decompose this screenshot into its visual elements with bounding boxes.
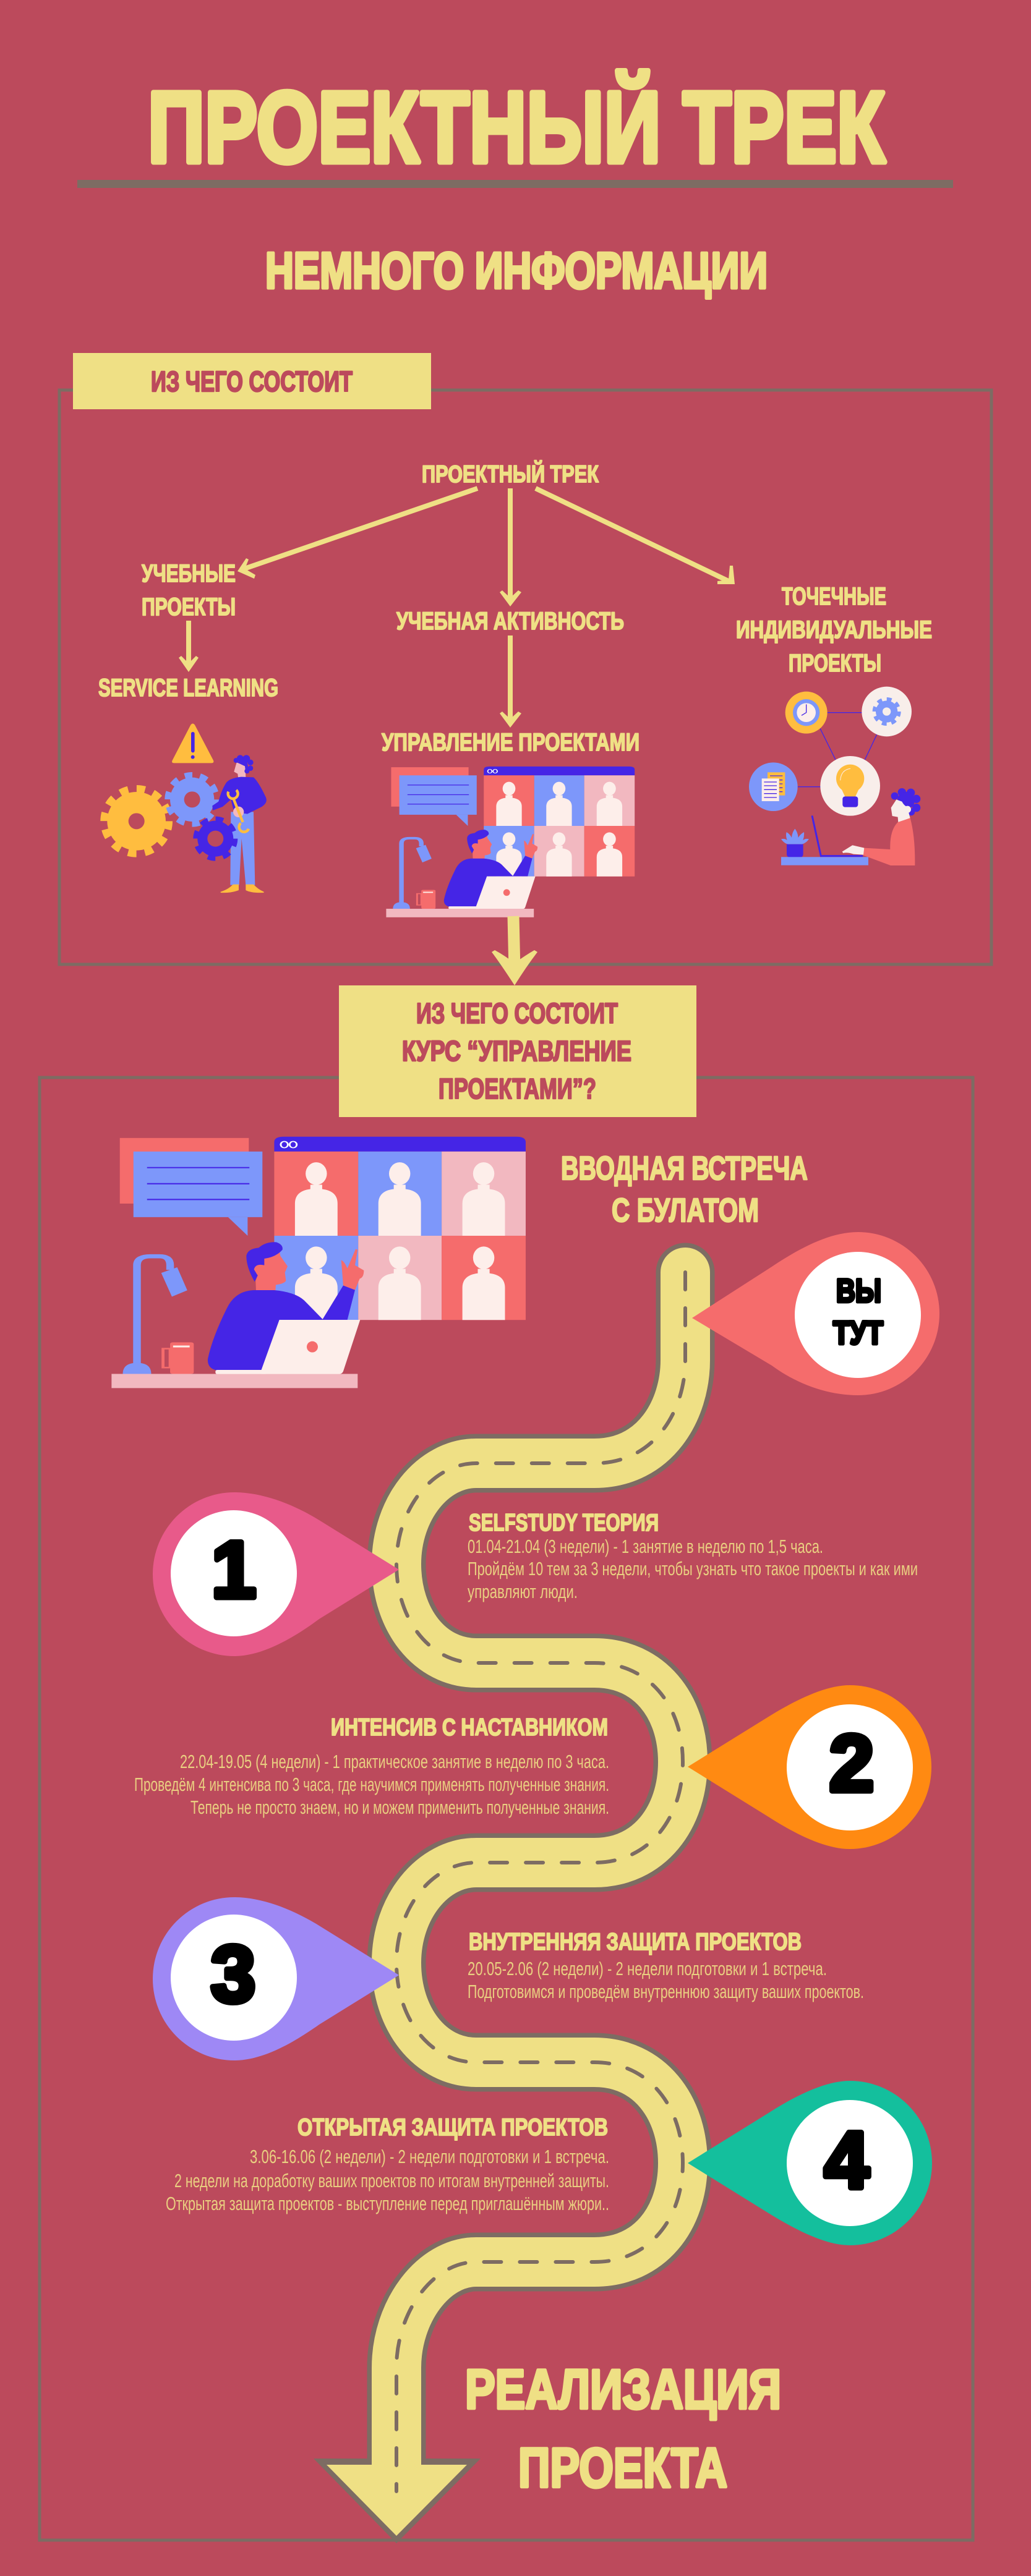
legs <box>221 812 264 893</box>
arrow: to course heading <box>492 916 537 985</box>
icon: dark gear <box>195 819 235 859</box>
text block: intensive with mentor: ИНТЕНСИВ С НАСТАВНИКОМ <box>331 1714 608 1741</box>
icon: online meeting illustration large <box>111 1137 526 1388</box>
label: project management: УПРАВЛЕНИЕ ПРОЕКТАМИ <box>382 729 640 756</box>
pin: you are here: ТУТ <box>833 1315 883 1351</box>
label: individual projects <box>736 583 932 677</box>
panel: project track structure <box>59 353 991 964</box>
text block: intensive with mentor <box>134 1714 609 1818</box>
text block: internal defense: Подготовимся и проведём внутреннюю защиту ваших проектов. <box>468 1981 864 2002</box>
icon: documents <box>749 762 798 811</box>
icon: plant <box>781 829 809 857</box>
arrow: to study projects <box>237 488 477 579</box>
label: study projects: ПРОЕКТЫ <box>142 593 236 621</box>
label: individual projects: ТОЧЕЧНЫЕ <box>782 583 886 610</box>
heading: intro meeting: ВВОДНАЯ ВСТРЕЧА <box>561 1150 808 1187</box>
desk <box>781 857 868 865</box>
icon: gear node <box>862 687 912 736</box>
text block: open defense: ОТКРЫТАЯ ЗАЩИТА ПРОЕКТОВ <box>297 2114 608 2141</box>
text block: open defense: 3.06-16.06 (2 недели) - 2 недели подготовки и 1 встреча. <box>250 2146 609 2167</box>
label: study projects <box>142 560 236 621</box>
icon: yellow gear <box>104 789 169 854</box>
text block: internal defense: ВНУТРЕННЯЯ ЗАЩИТА ПРОЕКТОВ <box>469 1929 802 1955</box>
label: study activity: УЧЕБНАЯ АКТИВНОСТЬ <box>396 608 624 635</box>
text block: selfstudy <box>468 1510 918 1602</box>
icon: person with idea nodes <box>749 687 920 865</box>
label: individual projects: ИНДИВИДУАЛЬНЫЕ <box>736 616 932 644</box>
label: service learning: SERVICE LEARNING <box>98 674 278 702</box>
icon: laptop <box>812 817 862 856</box>
pin: step 1 <box>153 1492 399 1656</box>
heading: intro meeting <box>561 1150 808 1229</box>
text block: intensive with mentor: 22.04-19.05 (4 недели) - 1 практическое занятие в неделю по 3 часа. <box>180 1751 609 1772</box>
text block: intensive with mentor: Проведём 4 интенсива по 3 часа, где научимся применять полученные знания. <box>134 1774 609 1795</box>
heading: intro meeting: С БУЛАТОМ <box>612 1192 759 1229</box>
pin: step 3 <box>153 1897 399 2060</box>
road <box>314 1272 685 2543</box>
subtitle: НЕМНОГО ИНФОРМАЦИИ <box>265 242 768 299</box>
pin: you are here: ВЫ <box>836 1273 881 1309</box>
heading: project realization: ПРОЕКТА <box>518 2438 727 2499</box>
heading: project realization: РЕАЛИЗАЦИЯ <box>465 2359 781 2421</box>
icon: clock <box>785 692 828 734</box>
icon: person with gears and warning <box>104 723 267 893</box>
pin: step 4 <box>688 2081 932 2245</box>
label: study projects: УЧЕБНЫЕ <box>142 560 236 587</box>
person <box>842 788 920 865</box>
text block: open defense: Открытая защита проектов - выступление перед приглашённым жюри.. <box>166 2193 609 2214</box>
pin: step 2 <box>688 1685 931 1849</box>
pin: step 3: 3 <box>211 1929 255 2019</box>
icon: wrench <box>228 790 249 832</box>
text block: intensive with mentor: Теперь не просто знаем, но и можем применить полученные знания. <box>190 1796 609 1818</box>
pin: you are here <box>692 1232 939 1395</box>
heading: what it consists of: ИЗ ЧЕГО СОСТОИТ <box>151 365 353 397</box>
pin: step 1: 1 <box>212 1524 256 1615</box>
icon: blue gear <box>168 775 216 824</box>
text block: open defense <box>166 2114 609 2214</box>
label: individual projects: ПРОЕКТЫ <box>789 650 881 677</box>
text block: internal defense: 20.05-2.06 (2 недели) - 2 недели подготовки и 1 встреча. <box>468 1958 827 1979</box>
text block: selfstudy: 01.04-21.04 (3 недели) - 1 занятие в неделю по 1,5 часа. <box>468 1536 823 1557</box>
heading: course structure <box>339 985 696 1117</box>
arrow: to project management <box>500 635 521 728</box>
pin: step 2: 2 <box>829 1718 874 1808</box>
person upper body <box>212 755 267 817</box>
icon: light bulb <box>820 756 880 816</box>
label: project track: ПРОЕКТНЫЙ ТРЕК <box>422 460 599 488</box>
heading: course structure: КУРС “УПРАВЛЕНИЕ <box>402 1035 631 1067</box>
pin: step 4: 4 <box>824 2115 869 2205</box>
panel: course steps <box>40 916 973 2543</box>
text block: internal defense <box>468 1929 864 2002</box>
arrow: to individual projects <box>536 488 735 584</box>
heading: course structure: ПРОЕКТАМИ”? <box>438 1073 596 1105</box>
text block: open defense: 2 недели на доработку ваших проектов по итогам внутренней защиты. <box>174 2170 609 2191</box>
arrow: to service learning <box>179 621 199 672</box>
arrow: to study activity <box>500 488 521 606</box>
heading: what it consists of <box>73 353 431 409</box>
heading: course structure: ИЗ ЧЕГО СОСТОИТ <box>416 997 618 1029</box>
icon: warning triangle <box>172 723 213 763</box>
text block: selfstudy: управляют люди. <box>468 1581 578 1602</box>
icon: online meeting illustration small <box>386 767 635 917</box>
heading: project realization <box>465 2359 781 2499</box>
text block: selfstudy: SELFSTUDY ТЕОРИЯ <box>469 1510 659 1536</box>
